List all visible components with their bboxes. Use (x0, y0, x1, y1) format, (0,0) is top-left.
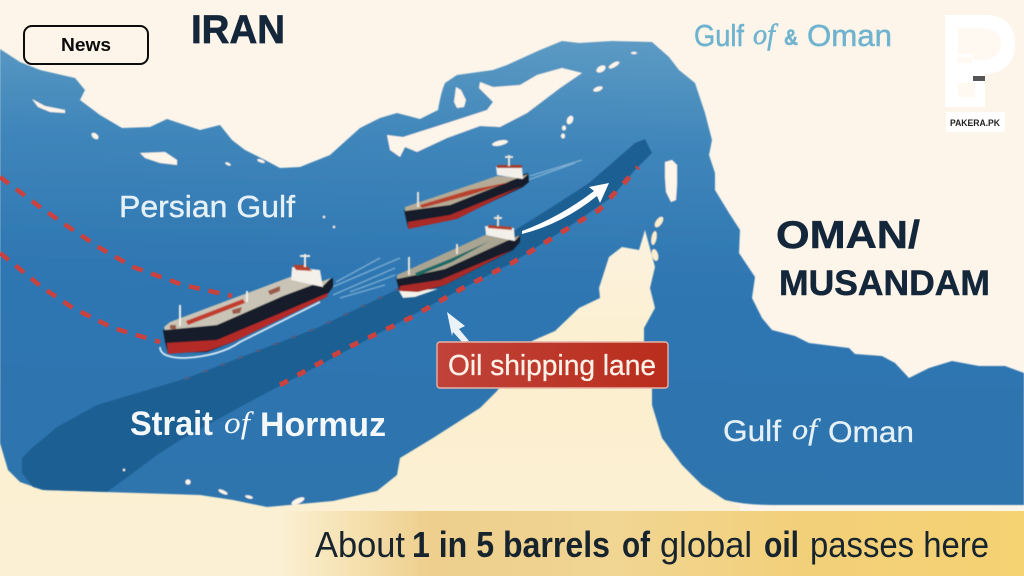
label: OMAN/MUSANDAM: OMAN/ (776, 214, 920, 257)
route: lane south edge (280, 167, 638, 385)
islands near the peninsula (650, 215, 665, 262)
deck (164, 277, 331, 330)
label: Gulf of Oman (723, 413, 914, 449)
callout text: Oil shipping lane (448, 350, 656, 382)
hull (396, 235, 520, 293)
label: Persian Gulf: Persian Gulf (119, 189, 295, 224)
superstructure (291, 267, 323, 287)
label: Strait of Hormuz: Hormuz (260, 406, 386, 444)
southern land (0, 225, 740, 576)
label: OMAN/MUSANDAM (776, 214, 990, 303)
shoreline islets (123, 469, 305, 506)
bridge top (497, 165, 522, 168)
mast (180, 254, 310, 326)
deck details (170, 286, 280, 329)
hull (163, 278, 333, 353)
superstructure (496, 167, 523, 179)
label: Gulf of & Oman: Gulf (694, 18, 744, 53)
deck (405, 174, 528, 211)
arrow: white route arrow (522, 183, 609, 234)
islands (32, 52, 677, 228)
label: Gulf of Oman: Gulf (723, 415, 782, 448)
route: upper west (0, 177, 232, 296)
logo mark (945, 15, 1015, 107)
logo plate (946, 112, 1005, 132)
banner text: of (622, 524, 651, 565)
logo: Pakera.pk (945, 15, 1015, 132)
news badge (24, 26, 148, 64)
banner text: oil (764, 524, 799, 565)
label: OMAN/MUSANDAM: MUSANDAM (779, 264, 990, 303)
bridge top (293, 265, 312, 271)
label: Gulf of & Oman: of (753, 18, 778, 51)
label: Strait of Hormuz (130, 405, 386, 444)
banner text: About (315, 524, 405, 565)
bow wave (160, 302, 320, 358)
ship: upper tanker (404, 155, 529, 229)
arrow: callout pointer (447, 312, 469, 342)
badge outline (24, 26, 148, 64)
ship: lane tanker (396, 215, 520, 298)
shipping lane (22, 139, 652, 492)
mast (418, 155, 513, 207)
white waterline (399, 289, 438, 298)
red boot (408, 186, 522, 229)
badge text: News (61, 35, 111, 55)
wakes (330, 160, 582, 298)
label: IRAN: IRAN (191, 8, 285, 52)
red dashed routes (0, 167, 638, 385)
callout: oil shipping lane (437, 342, 668, 388)
hull (404, 173, 529, 228)
island: Qeshm (387, 68, 582, 157)
logo text: PAKERA.PK (950, 118, 1000, 129)
mast (409, 215, 502, 275)
deck pipe (415, 241, 490, 276)
callout box (437, 342, 668, 388)
logo dash (973, 76, 985, 81)
superstructure (485, 226, 515, 241)
label: Gulf of & Oman (694, 18, 892, 53)
route: lane north edge (185, 288, 400, 379)
label: Strait of Hormuz: of (224, 405, 255, 440)
label: Gulf of & Oman: Oman (807, 18, 892, 53)
label: Gulf of & Oman: & (784, 25, 798, 50)
bottom banner (280, 511, 1024, 576)
banner text: passes here (810, 524, 989, 565)
label: Strait of Hormuz: Strait (130, 405, 213, 443)
red boot (167, 293, 328, 354)
ship: large tanker (160, 254, 333, 358)
banner text: global (660, 524, 752, 565)
red boot (399, 250, 512, 292)
label: Gulf of Oman: Oman (828, 416, 914, 449)
deck pipe (420, 182, 510, 208)
logo cutouts (958, 28, 1001, 97)
deck pipe (186, 299, 245, 325)
banner text (315, 524, 989, 565)
route: lower west (0, 253, 160, 342)
bottom land strip (0, 505, 740, 576)
deck (397, 235, 520, 279)
banner text: 1 in 5 barrels (412, 524, 610, 565)
label: Gulf of Oman: of (792, 413, 821, 446)
bridge top (488, 225, 512, 230)
